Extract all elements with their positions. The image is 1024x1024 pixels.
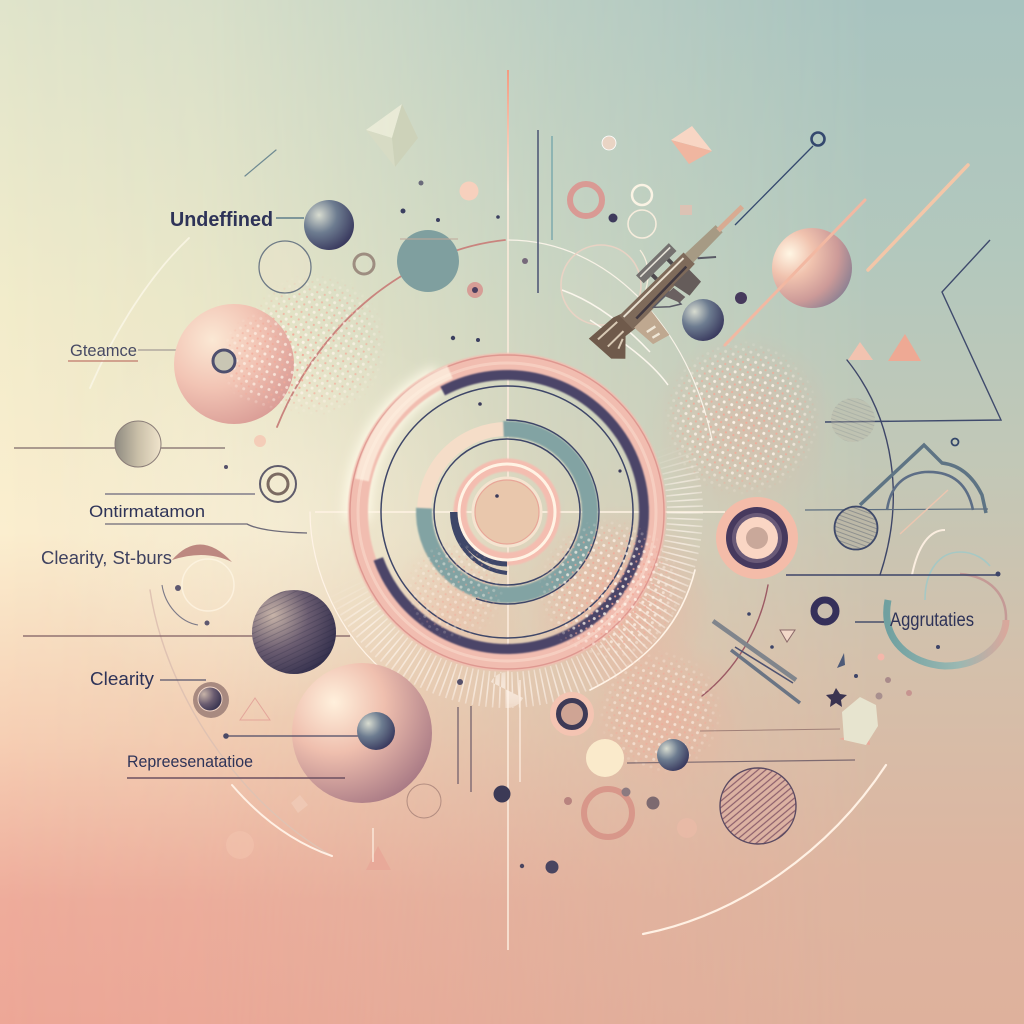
left ring glow (358, 378, 440, 520)
textured dark sphere (23, 590, 350, 674)
label: Gteamce (68, 341, 208, 361)
central concentric rings (322, 327, 692, 697)
teal disc with ring (259, 230, 459, 293)
label: Clearity (90, 669, 206, 689)
right angular lines (825, 240, 1001, 446)
pale hexagon (839, 697, 878, 745)
label: Clearity, St-burs (41, 544, 234, 626)
pink rods (725, 165, 968, 345)
small ring cluster (224, 435, 296, 502)
bullseye ring (716, 497, 798, 579)
pink octahedron (671, 126, 712, 164)
copper ring (584, 789, 632, 837)
sphere near rifle (682, 299, 724, 341)
label: Ontirmatamon: Ontirmatamon (89, 502, 205, 521)
hatched circle (720, 768, 796, 844)
sphere: large pink left (174, 304, 320, 424)
sphere: large pink bottom (223, 663, 432, 803)
dot-pattern clouds (243, 273, 820, 774)
sphere: dark top left (304, 200, 354, 250)
small dark dot (735, 292, 747, 304)
dark sphere with line (627, 729, 855, 771)
axis lines (315, 70, 725, 950)
label: Clearity, St-burs: Clearity, St-burs (41, 548, 172, 568)
label: Aggrutaties with loop (786, 572, 1006, 666)
bottom centre ring and glow (553, 695, 624, 777)
label: Ontirmatamon (89, 494, 307, 533)
label: Gteamce: Gteamce (70, 341, 137, 360)
label: Repreesenatatioe: Repreesenatatioe (127, 753, 253, 771)
vertical lines near centre (538, 130, 552, 293)
large orbit arcs (90, 150, 893, 934)
label: Clearity: Clearity (90, 669, 154, 689)
small markers (747, 612, 912, 707)
top right rings (561, 132, 824, 385)
bottom dots (520, 788, 697, 874)
house-shape line and hatched circle (805, 445, 990, 600)
label: Aggrutaties with loop: Aggrutaties (890, 610, 974, 631)
scattered top dots (400, 136, 616, 342)
icon: rifle (580, 188, 771, 377)
small lens sphere (193, 682, 229, 718)
sphere: top right (772, 228, 852, 308)
radial tick band (338, 456, 703, 708)
soft pink glows behind dot clouds (385, 330, 840, 795)
sphere: gray half-tone disc (14, 421, 225, 467)
crossed rods (713, 621, 800, 703)
bottom-left small shapes (226, 679, 520, 870)
small dark ring (814, 600, 836, 622)
label: Undeffined: Undeffined (170, 209, 273, 231)
top gem (366, 104, 418, 167)
